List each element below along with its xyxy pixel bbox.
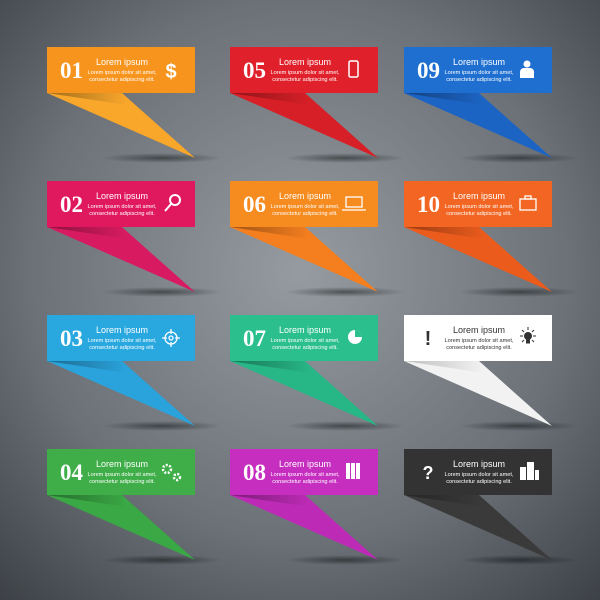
card 04: consectetur adipiscing elit. (89, 479, 155, 485)
card 08 (230, 449, 405, 565)
card 03: consectetur adipiscing elit. (89, 345, 155, 351)
icon: dollar: $ (165, 61, 177, 83)
card 05: 05 (243, 58, 266, 83)
card 10: 10 (417, 192, 440, 217)
card 03: Lorem ipsum (96, 325, 148, 335)
card 08: Lorem ipsum (279, 459, 331, 469)
card 11 (404, 315, 579, 431)
card 08: Lorem ipsum dolor sit amet, (270, 472, 340, 478)
card 12 (404, 449, 579, 565)
card 04: Lorem ipsum (96, 459, 148, 469)
icon: laptop (342, 197, 366, 210)
card 02 (47, 181, 222, 297)
card 09: 09 (417, 58, 440, 83)
icon: magnifier (165, 195, 180, 211)
card 09: consectetur adipiscing elit. (446, 77, 512, 83)
card 10 (404, 181, 579, 297)
card 04 (47, 449, 222, 565)
card 02: consectetur adipiscing elit. (89, 211, 155, 217)
card 11: Lorem ipsum dolor sit amet, (444, 338, 514, 344)
card 11: ! (425, 328, 431, 350)
card 11: consectetur adipiscing elit. (446, 345, 512, 351)
icon: briefcase (520, 196, 536, 210)
card 05: Lorem ipsum (279, 57, 331, 67)
card 06: Lorem ipsum (279, 191, 331, 201)
card 10: consectetur adipiscing elit. (446, 211, 512, 217)
icon: phone (349, 61, 358, 77)
card 07 (230, 315, 405, 431)
card 02: Lorem ipsum dolor sit amet, (87, 204, 157, 210)
card 12: Lorem ipsum dolor sit amet, (444, 472, 514, 478)
card 01 (47, 47, 222, 163)
card 05 (230, 47, 405, 163)
icon: buildings (520, 462, 539, 480)
card 01: 01 (60, 58, 83, 83)
card 10: Lorem ipsum dolor sit amet, (444, 204, 514, 210)
card 03: Lorem ipsum dolor sit amet, (87, 338, 157, 344)
icon: target (162, 329, 180, 347)
card 10: Lorem ipsum (453, 191, 505, 201)
card 11: Lorem ipsum (453, 325, 505, 335)
card 01: Lorem ipsum (96, 57, 148, 67)
card 06: consectetur adipiscing elit. (272, 211, 338, 217)
card 03 (47, 315, 222, 431)
card 04: Lorem ipsum dolor sit amet, (87, 472, 157, 478)
card 09: Lorem ipsum (453, 57, 505, 67)
card 04: 04 (60, 460, 84, 485)
card 09 (404, 47, 579, 163)
card 07: Lorem ipsum dolor sit amet, (270, 338, 340, 344)
card 02: Lorem ipsum (96, 191, 148, 201)
icon: pie chart (348, 330, 362, 344)
card 01: Lorem ipsum dolor sit amet, (87, 70, 157, 76)
icon: light bulb (520, 327, 536, 343)
card 05: consectetur adipiscing elit. (272, 77, 338, 83)
icon: person (520, 60, 534, 78)
icon: gears (163, 465, 180, 480)
card 07: Lorem ipsum (279, 325, 331, 335)
card 02: 02 (60, 192, 83, 217)
card 08: 08 (243, 460, 266, 485)
card 06 (230, 181, 405, 297)
card 12: consectetur adipiscing elit. (446, 479, 512, 485)
card 06: 06 (243, 192, 266, 217)
card 08: consectetur adipiscing elit. (272, 479, 338, 485)
card 03: 03 (60, 326, 83, 351)
card 06: Lorem ipsum dolor sit amet, (270, 204, 340, 210)
card 07: 07 (243, 326, 266, 351)
card 12: ? (422, 463, 434, 483)
icon: binders (346, 463, 360, 479)
card 07: consectetur adipiscing elit. (272, 345, 338, 351)
card 05: Lorem ipsum dolor sit amet, (270, 70, 340, 76)
card 01: consectetur adipiscing elit. (89, 77, 155, 83)
card 12: Lorem ipsum (453, 459, 505, 469)
card 09: Lorem ipsum dolor sit amet, (444, 70, 514, 76)
